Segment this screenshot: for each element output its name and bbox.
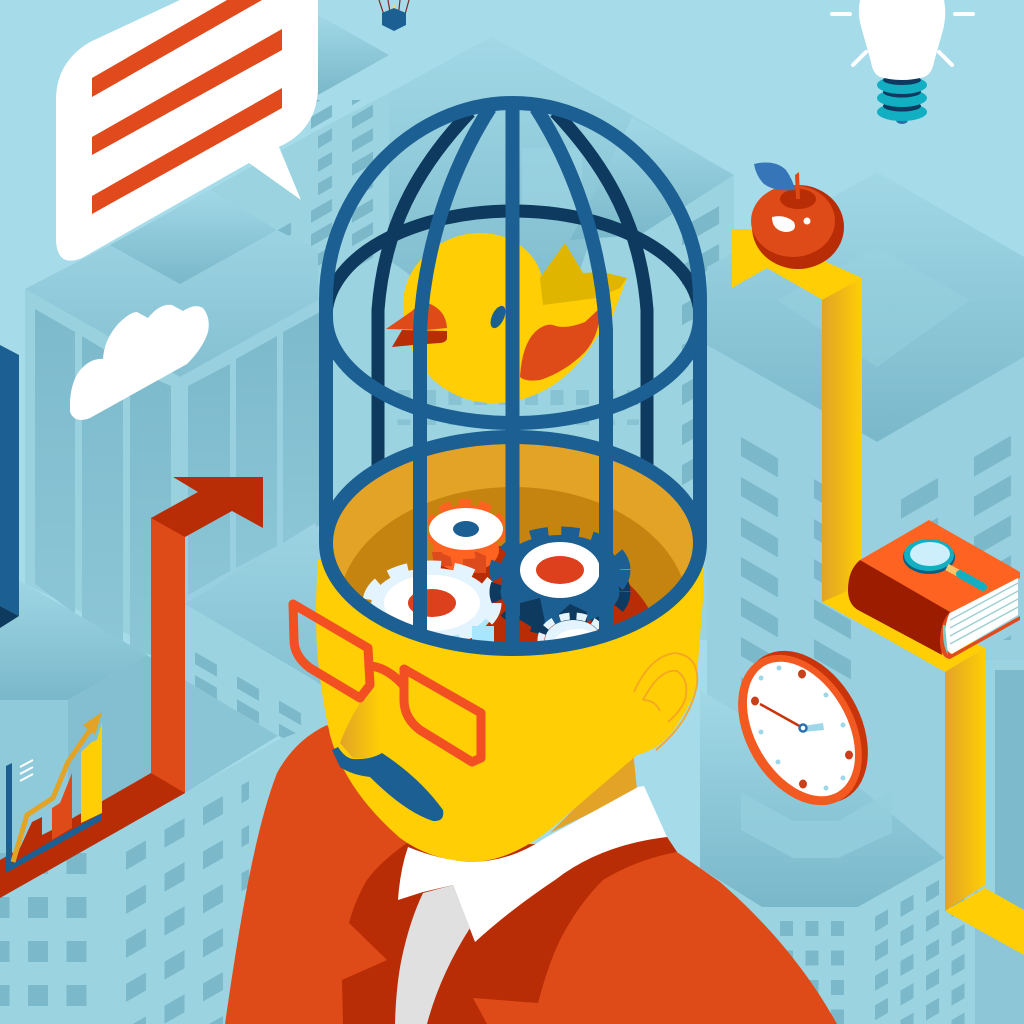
jacket (225, 725, 837, 1024)
ear (634, 653, 697, 750)
gear: orange (429, 503, 503, 573)
gear: small white (538, 612, 599, 642)
glasses (293, 604, 481, 762)
cage front curved bars (420, 108, 490, 634)
neck (550, 750, 637, 833)
icon: small balloon basket (379, 0, 409, 31)
icon: light bulb (832, 0, 973, 124)
apple (751, 162, 844, 269)
cage base ring (326, 437, 700, 649)
speech bubble (56, 0, 318, 261)
gear: blue (495, 532, 625, 630)
line chart (6, 712, 102, 873)
clock (713, 628, 894, 827)
bird (386, 233, 627, 403)
yellow path (732, 229, 1024, 955)
gear: white (368, 566, 496, 646)
moustache and nose (332, 690, 443, 821)
book with magnifier (848, 520, 1020, 659)
arrow: red rising arrow (0, 477, 263, 898)
icon: cloud (70, 305, 209, 420)
head (316, 560, 703, 862)
cage back bars (326, 112, 700, 470)
necktie (395, 885, 470, 1024)
cage dome and outer bars (326, 103, 700, 543)
blue slab left edge (0, 345, 19, 628)
cage front (326, 103, 700, 650)
shirt collar (398, 786, 667, 942)
cage middle ring front (326, 317, 700, 423)
open head interior with gears (333, 444, 693, 642)
